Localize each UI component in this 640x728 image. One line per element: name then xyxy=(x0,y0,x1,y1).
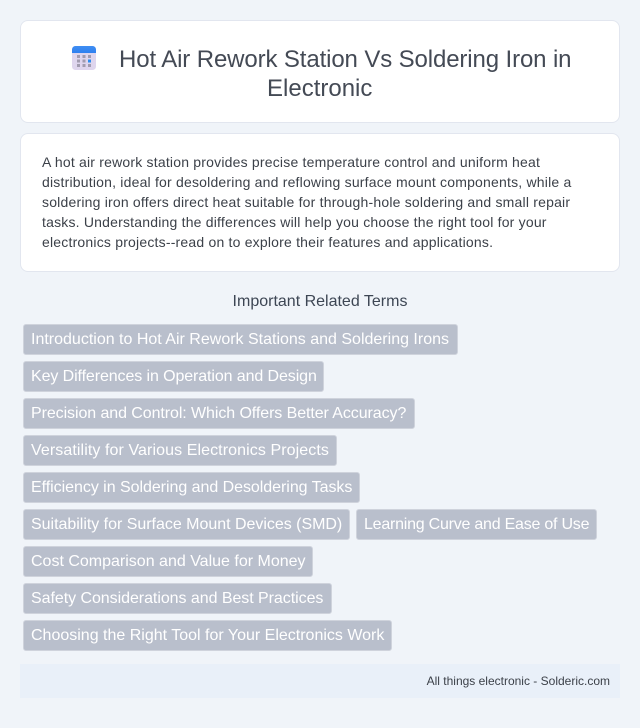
intro text panel: distribution, ideal for desoldering and reflowing surface mount components, while a xyxy=(42,174,571,190)
tag: Learning Curve and Ease of Use xyxy=(364,516,589,533)
tag xyxy=(23,435,337,466)
intro text panel: electronics projects--read on to explore their features and applications. xyxy=(42,234,493,250)
tag xyxy=(23,398,415,429)
title: Hot Air Rework Station Vs Soldering Iron in xyxy=(119,46,571,73)
tag xyxy=(23,583,332,614)
tag: Safety Considerations and Best Practices xyxy=(31,590,323,607)
tag: Versatility for Various Electronics Projects xyxy=(31,442,329,459)
tag: Suitability for Surface Mount Devices (SMD) xyxy=(31,516,342,533)
intro text panel: soldering iron offers direct heat suitable for through-hole soldering and small repair xyxy=(42,194,570,210)
intro text panel: tasks. Understanding the differences will help you choose the right tool for your xyxy=(42,214,547,230)
footer bar xyxy=(20,664,620,698)
tag: Precision and Control: Which Offers Better Accuracy? xyxy=(31,405,406,422)
tag: Key Differences in Operation and Design xyxy=(31,368,317,385)
footer text: All things electronic - Solderic.com xyxy=(427,674,610,688)
header panel xyxy=(20,20,620,123)
tag xyxy=(23,361,324,392)
tag xyxy=(23,546,313,577)
intro text panel xyxy=(20,133,620,272)
tag xyxy=(23,472,360,503)
icon: calendar grid xyxy=(72,46,96,70)
tag xyxy=(23,509,350,540)
tag xyxy=(23,620,392,651)
tag list xyxy=(23,324,597,651)
title xyxy=(119,46,571,102)
tag xyxy=(356,509,597,540)
tag: Cost Comparison and Value for Money xyxy=(31,553,306,570)
section heading: Important Related Terms xyxy=(233,293,407,310)
tag: Introduction to Hot Air Rework Stations and Soldering Irons xyxy=(31,331,449,348)
title: Electronic xyxy=(267,75,372,102)
intro text panel: A hot air rework station provides precise temperature control and uniform heat xyxy=(42,154,540,170)
tag: Efficiency in Soldering and Desoldering Tasks xyxy=(31,479,352,496)
tag xyxy=(23,324,458,355)
tag: Choosing the Right Tool for Your Electronics Work xyxy=(31,627,384,644)
